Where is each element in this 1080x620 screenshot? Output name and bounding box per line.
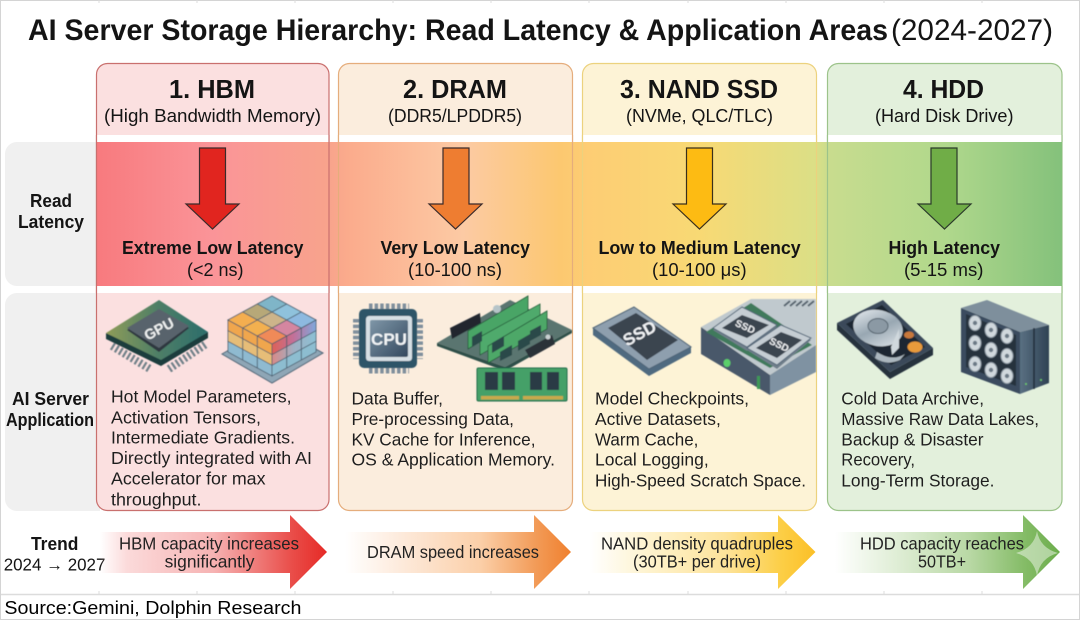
text block: DRAM applications: Pre-processing Data, [352, 409, 514, 429]
text block: DRAM applications: OS & Application Memory. [352, 450, 555, 470]
icon: SSD drive [593, 307, 691, 376]
icon: CPU chip: CPU [371, 330, 407, 349]
text block: HBM applications: Intermediate Gradients. [111, 428, 295, 448]
latency label: HDD: High Latency [888, 237, 1001, 258]
arrow: HBM latency [186, 148, 239, 229]
row label background: read latency [5, 142, 96, 286]
text block: HDD applications: Backup & Disaster [841, 429, 984, 449]
read latency band [96, 135, 1062, 293]
panel: DRAM [338, 64, 572, 510]
arrow: HDD latency [918, 148, 971, 229]
text block: HDD applications: Long-Term Storage. [841, 470, 994, 490]
panel: NAND SSD [582, 64, 816, 510]
text block: SSD applications: Warm Cache, [595, 429, 698, 449]
row label background: AI server application [5, 293, 100, 511]
trend arrow: NAND SSD [590, 515, 816, 589]
arrow: SSD latency [673, 148, 726, 229]
icon: GPU chip [106, 300, 208, 369]
source note: Source:Gemini, Dolphin Research [4, 598, 301, 618]
icon: RAM module [477, 368, 567, 401]
icon: motherboard with memory modules [437, 296, 572, 371]
text block: DRAM applications: KV Cache for Inference, [352, 429, 536, 449]
row label: read latency: Latency [18, 211, 85, 232]
text block: HBM applications [111, 387, 312, 509]
heading: NAND SSD: 3. NAND SSD [620, 74, 778, 104]
text block: SSD applications: High-Speed Scratch Space. [595, 470, 806, 490]
icon: sparkle [1016, 531, 1058, 576]
subheading: NAND SSD: (NVMe, QLC/TLC) [626, 105, 773, 126]
trend arrow: DRAM: DRAM speed increases [367, 542, 539, 562]
icon: hard disk drive [837, 300, 933, 379]
subheading: DRAM: (DDR5/LPDDR5) [388, 105, 522, 126]
latency label: HDD: (5-15 ms) [904, 259, 984, 280]
heading: DRAM: 2. DRAM [403, 74, 507, 104]
subheading: HDD: (Hard Disk Drive) [875, 105, 1014, 126]
text block: SSD applications: Active Datasets, [595, 409, 721, 429]
text block: HDD applications [841, 388, 1039, 490]
latency label: DRAM: (10-100 ns) [408, 259, 502, 280]
text block: HBM applications: Directly integrated with AI [111, 448, 312, 468]
heading: HDD: 4. HDD [903, 74, 984, 104]
trend arrow: DRAM [345, 515, 571, 589]
text block: HDD applications: Recovery, [841, 450, 915, 470]
title: (2024-2027) [891, 14, 1053, 47]
title: AI Server Storage Hierarchy: Read Latency & Application Areas [28, 14, 888, 47]
latency label: SSD: Low to Medium Latency [598, 237, 801, 258]
text block: HBM applications: Hot Model Parameters, [111, 387, 292, 407]
text block: SSD applications: Model Checkpoints, [595, 388, 749, 408]
trend arrow: NAND SSD: NAND density quadruples [601, 533, 793, 553]
text block: HBM applications: throughput. [111, 489, 202, 509]
latency label: HBM: (<2 ns) [187, 259, 244, 280]
row label: trend: Trend [31, 533, 78, 554]
row label: AI server application [6, 388, 94, 430]
latency label: HDD [888, 237, 1001, 280]
trend arrow: HBM: significantly [165, 552, 255, 572]
latency label: SSD [598, 237, 801, 280]
row label: read latency: Read [30, 190, 72, 211]
icon: SSD drive: SSD [620, 317, 660, 350]
icon: server with SSD drives: SSD [733, 318, 756, 337]
text block: HDD applications: Massive Raw Data Lakes, [841, 409, 1039, 429]
latency label: HBM: Extreme Low Latency [122, 237, 304, 258]
text block: DRAM applications [352, 388, 555, 470]
row label: AI server application: Application [6, 409, 94, 430]
latency label: SSD: (10-100 μs) [652, 259, 747, 280]
icon: GPU chip: GPU [142, 315, 177, 344]
icon: CPU chip [356, 306, 420, 370]
latency label: DRAM [380, 237, 531, 280]
arrow: DRAM latency [429, 148, 482, 229]
latency label: HBM [122, 237, 304, 280]
trend arrow: NAND SSD: (30TB+ per drive) [633, 552, 761, 572]
icon: storage rack [961, 300, 1049, 394]
text block: HBM applications: Activation Tensors, [111, 407, 261, 427]
subheading: HBM: (High Bandwidth Memory) [104, 105, 321, 126]
icon: server with SSD drives: SSD [767, 336, 790, 355]
heading: HBM: 1. HBM [169, 74, 255, 104]
trend arrow: HBM: HBM capacity increases [119, 533, 299, 553]
icon: HBM memory cube stack [222, 296, 323, 383]
text block: HDD applications: Cold Data Archive, [841, 388, 984, 408]
trend arrow: HBM [100, 515, 327, 589]
row label: trend [4, 533, 105, 575]
panel: HBM [96, 64, 329, 510]
text block: SSD applications [595, 388, 806, 490]
latency label: DRAM: Very Low Latency [380, 237, 531, 258]
row label: read latency [18, 190, 85, 232]
row label: AI server application: AI Server [12, 388, 89, 409]
row label: trend: 2024 → 2027 [4, 555, 105, 575]
icon: server with SSD drives [701, 299, 816, 395]
trend arrow: HDD: 50TB+ [918, 552, 966, 572]
trend arrow: HDD [835, 515, 1060, 589]
trend arrow: HDD: HDD capacity reaches [860, 533, 1024, 553]
text block: DRAM applications: Data Buffer, [352, 388, 443, 408]
text block: SSD applications: Local Logging, [595, 450, 709, 470]
text block: HBM applications: Accelerator for max [111, 469, 266, 489]
panel: HDD [828, 64, 1062, 510]
